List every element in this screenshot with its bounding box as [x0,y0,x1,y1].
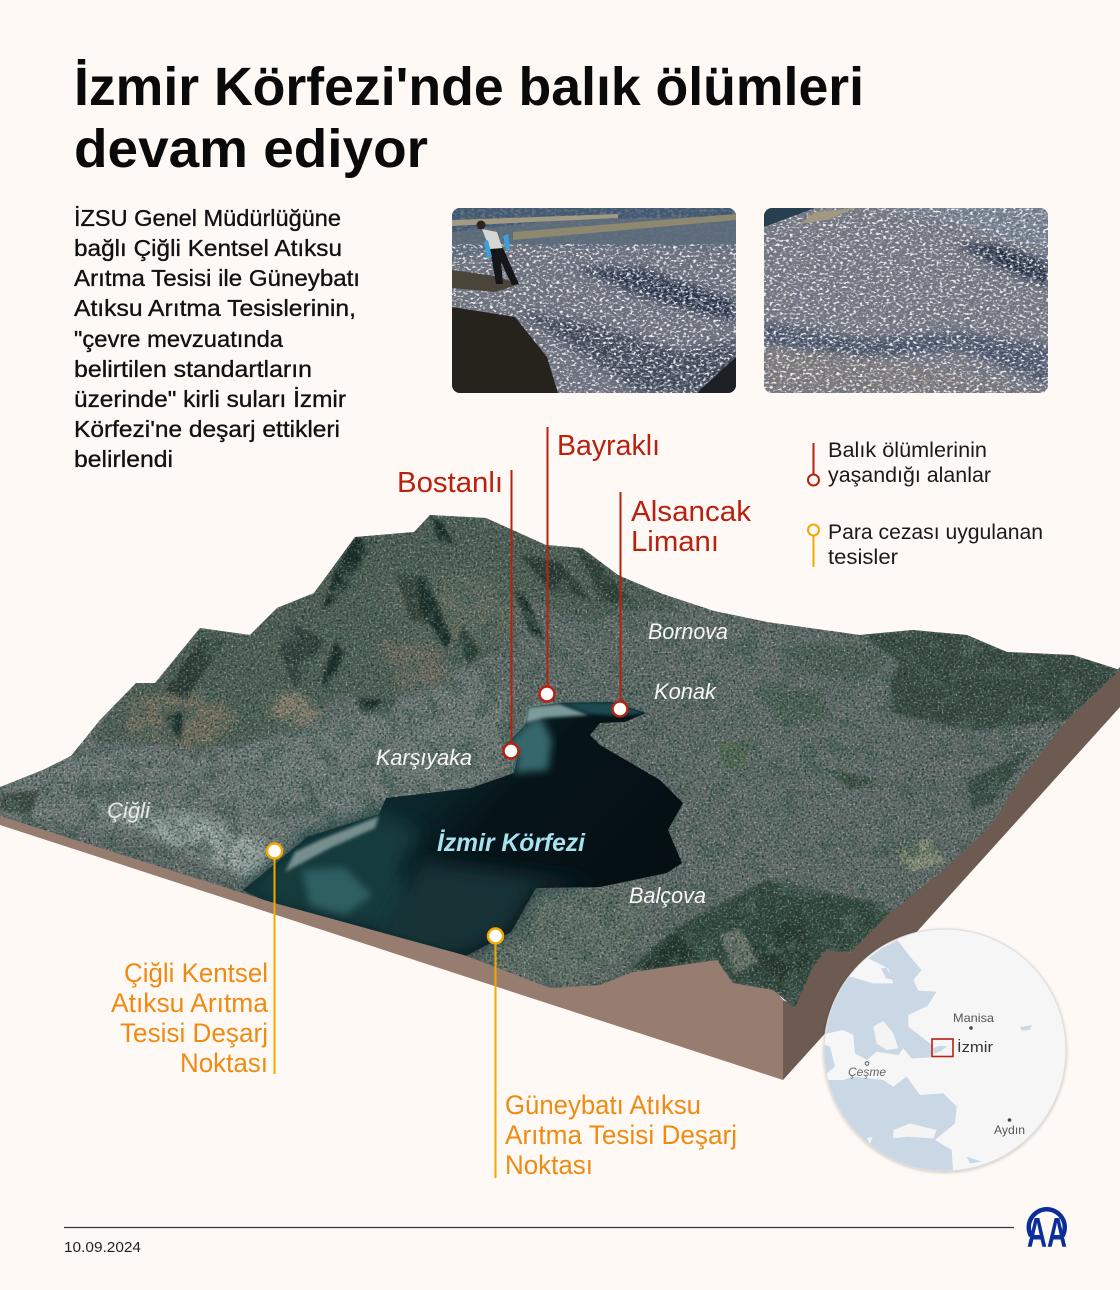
date: 10.09.2024 [64,1240,141,1256]
south water tone [380,860,600,957]
title [74,57,864,179]
locator map: İzmir [957,1038,993,1056]
marker: Alsancak Limanı: Limanı [631,526,719,558]
intro text block: "çevre mevzuatında [74,326,283,352]
terrain block [0,500,1120,1080]
legend: fined facilities: Para cezası uygulanan [828,521,1043,544]
place label: Balçova: Balçova [629,883,706,908]
İzmir highlight box [932,1039,953,1056]
intro text block: belirtilen standartların [74,356,312,382]
marker: Güneybatı Atıksu Arıtma Tesisi: Güneybatı Atıksu [505,1090,701,1120]
intro text block: Arıtma Tesisi ile Güneybatı [74,265,360,291]
brown slopes [120,690,240,750]
front side wall [0,812,783,1080]
marker: Güneybatı Atıksu Arıtma Tesisi: Noktası [505,1150,593,1180]
place label: Çiğli: Çiğli [107,798,151,823]
marker: Bostanlı: Bostanlı [397,467,503,499]
city west and Karşıyaka [2,673,504,848]
marker: Çiğli Kentsel Atıksu Arıtma Tesisi [111,844,282,1078]
İzmir bay small [933,1046,947,1054]
south mountains [627,880,890,1008]
locator map [820,929,1066,1177]
marker: Bayraklı: Bayraklı [557,430,660,462]
photo: dead fish covering the water [764,208,1048,393]
icon: worker figure [476,220,519,285]
locator map: Çeşme [848,1065,886,1079]
west bay shallow water [243,814,464,957]
icon: AA logo: AA [1027,1209,1067,1256]
eastern mountains [860,630,1120,730]
locator map: Aydın [994,1123,1025,1137]
gulf water [243,702,683,957]
title: devam ediyor [74,119,428,179]
intro text block: üzerinde" kirli suları İzmir [74,386,346,412]
north Aegean water [820,940,937,1060]
legend: fish death areas: Balık ölümlerinin [828,439,987,462]
place label: Karşıyaka: Karşıyaka [376,745,472,770]
marker: Bostanlı [397,467,518,758]
marker: Güneybatı Atıksu Arıtma Tesisi: Arıtma Tesisi Deşarj [505,1120,737,1150]
mountains north [90,515,680,745]
legend: fined facilities [808,521,1043,569]
marker: Güneybatı Atıksu Arıtma Tesisi [488,928,737,1180]
legend: fish death areas: yaşandığı alanlar [828,464,991,487]
terrain surface [0,500,1120,1020]
place label: İzmir Körfezi: İzmir Körfezi [437,829,586,857]
intro text block [74,205,360,472]
right side wall [783,667,1120,1080]
light quarry patch [895,838,945,872]
legend: fish death areas [808,439,991,487]
south Aegean water [828,1076,957,1170]
title: İzmir Körfezi'nde balık ölümleri [74,57,864,117]
intro text block: Atıksu Arıtma Tesislerinin, [74,295,356,321]
intro text block: belirlendi [74,446,173,472]
legend: fined facilities: tesisler [828,546,898,569]
green patches in city [718,740,750,770]
intro text block: İZSU Genel Müdürlüğüne [74,205,341,231]
intro text block: bağlı Çiğli Kentsel Atıksu [74,235,342,261]
marker: Alsancak Limanı: Alsancak [631,496,752,528]
marker: Çiğli Kentsel Atıksu Arıtma Tesisi: Noktası [180,1048,268,1078]
icon: AA logo [1027,1209,1067,1256]
north bay shallow water [506,716,552,773]
footer rule [64,1226,1014,1228]
west water [824,1045,835,1074]
locator map: Manisa [953,1011,994,1025]
place label: Bornova: Bornova [648,619,728,644]
marker: Bayraklı [540,427,660,702]
photo: worker and dead fish on shore [452,208,736,393]
marker: Çiğli Kentsel Atıksu Arıtma Tesisi: Tesisi Deşarj [120,1018,268,1048]
marker: Çiğli Kentsel Atıksu Arıtma Tesisi: Çiğli Kentsel [124,958,268,988]
intro text block: Körfezi'ne deşarj ettikleri [74,416,340,442]
dark ridges [165,515,640,740]
place label: Konak: Konak [654,679,717,704]
Çiğli industrial area [90,805,285,880]
south shore delta [480,888,650,985]
marker: Çiğli Kentsel Atıksu Arıtma Tesisi: Atıksu Arıtma [111,988,269,1018]
marker: Alsancak Limanı [612,492,752,716]
